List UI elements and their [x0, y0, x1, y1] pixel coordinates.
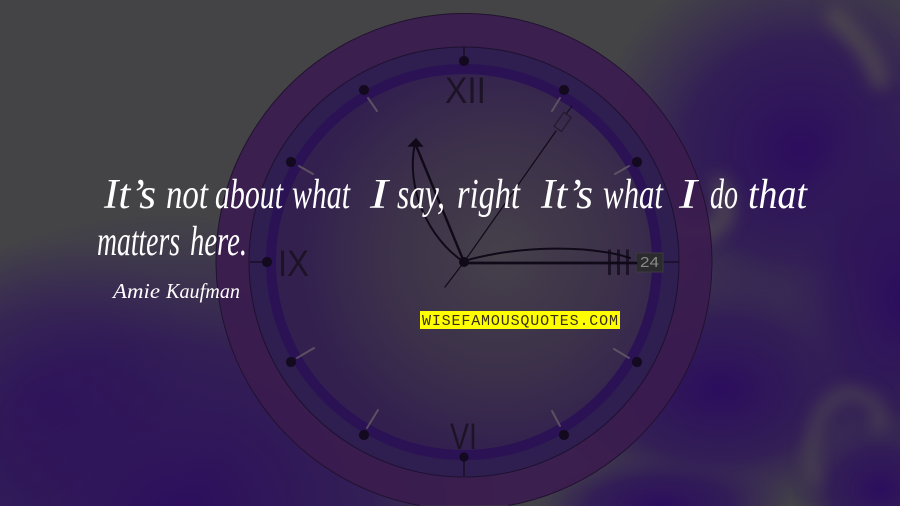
clock hands: [409, 106, 636, 287]
author: Kaufman: [165, 279, 240, 303]
roman numerals: III: [605, 242, 632, 283]
roman numerals: IX: [278, 243, 309, 284]
quote line 1: It’s: [103, 172, 156, 218]
hour markers: [250, 47, 679, 476]
quote line 1: do: [710, 172, 738, 218]
quote line 1: what: [603, 172, 664, 218]
date window: 24: [640, 254, 659, 271]
quote line 1: I: [678, 172, 700, 218]
date window: [636, 253, 663, 272]
quote line 2: matters: [97, 219, 180, 265]
clock dial: [272, 70, 656, 454]
dark minute track: [271, 69, 657, 455]
quote line 1: right: [457, 172, 521, 218]
roman numerals: XII: [445, 70, 486, 111]
quote text: [97, 172, 808, 265]
clock rim: [216, 14, 712, 506]
quote line 1: It’s: [540, 172, 593, 218]
quote line 1: what: [292, 172, 351, 218]
author: Amie: [111, 279, 160, 303]
roman numerals: [278, 70, 632, 457]
watermark badge: WISEFAMOUSQUOTES.COM: [422, 313, 618, 330]
author: [111, 279, 240, 303]
quote line 1: about: [215, 172, 284, 218]
clock inner ring line: [249, 47, 679, 477]
clock: [216, 14, 712, 506]
quote line 1: not: [166, 172, 209, 218]
roman numerals: VI: [450, 416, 477, 457]
quote line 1: [103, 172, 808, 218]
quote line 2: here.: [190, 219, 247, 265]
quote line 1: I: [369, 172, 391, 218]
quote line 1: say,: [397, 172, 445, 218]
pale minute ticks: [297, 98, 629, 428]
quote line 1: that: [748, 172, 808, 218]
